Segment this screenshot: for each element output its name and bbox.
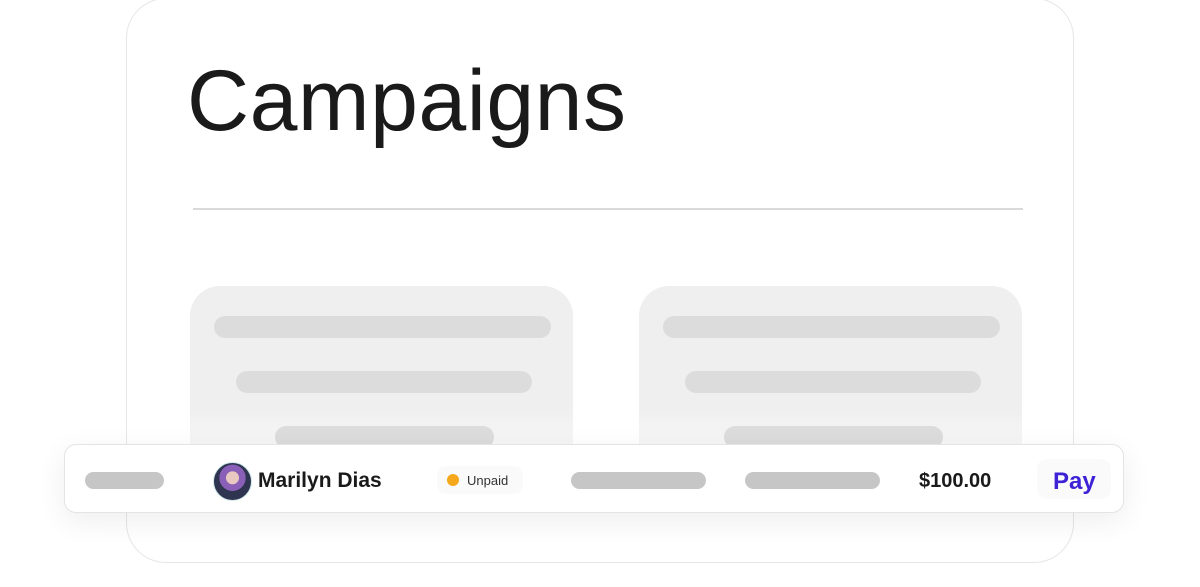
pay button [1037,459,1111,499]
card placeholder left [190,286,573,506]
main panel: campaigns page [126,0,1074,563]
title: Campaigns [187,53,626,149]
icon: avatar [213,462,252,501]
status pill: unpaid [437,466,523,494]
payment row [64,444,1124,513]
name: Marilyn Dias [258,469,382,492]
status pill: unpaid: Unpaid [467,473,508,488]
divider [193,208,1023,210]
amount: $100.00 [919,470,991,492]
card placeholder right [639,286,1022,506]
pay button: Pay [1053,468,1096,495]
